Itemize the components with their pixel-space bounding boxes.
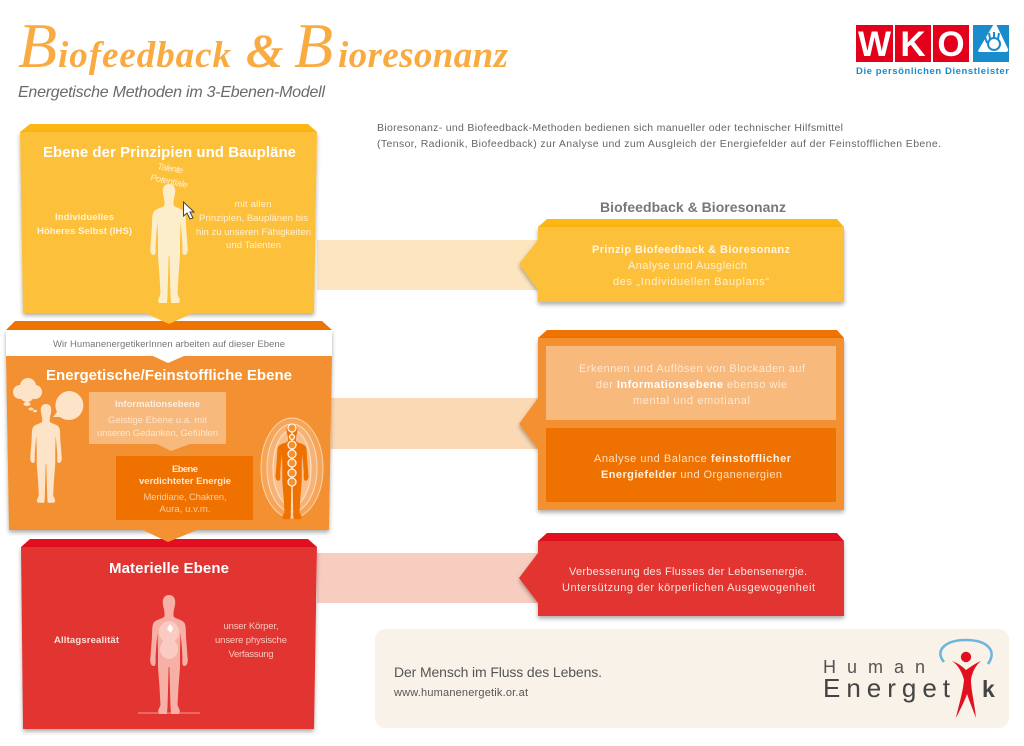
panel: Prinzip Biofeedback (519, 219, 844, 302)
banner: Wir HumanenergetikerInnen: Wir HumanenergetikerInnen arbeiten auf dieser Ebene (53, 339, 285, 350)
box: Energiefelder (546, 428, 836, 502)
text: Prinzipien description: Prinzipien, Bauplänen bis (199, 213, 308, 224)
text: Prinzipien description (196, 199, 311, 251)
box: Informationsebene: Geistige Ebene u.a. mit (108, 415, 207, 426)
logo: WKO: Die persönlichen Dienstleister (856, 66, 1009, 77)
text: physical description: unsere physische (215, 635, 287, 646)
panel: Lebensenergie: Verbesserung des Flusses der Lebensenergie. (569, 566, 807, 578)
footer url: www.humanenergetik.or.at (393, 687, 528, 699)
footer slogan: Der Mensch im Fluss des Lebens. (394, 664, 602, 680)
panel: Materielle Ebene (21, 539, 317, 729)
connector band: yellow (317, 240, 539, 290)
logo: WKO: K (900, 25, 926, 64)
box: Ebene verdichteter Energie: Meridiane, Chakren, (144, 492, 226, 503)
text: Prinzipien description: mit allen (234, 199, 272, 210)
banner: Wir HumanenergetikerInnen (6, 330, 332, 363)
panel: Prinzip Biofeedback: Analyse und Ausgleich (628, 260, 747, 272)
panel: Ebene der Prinzipien (20, 124, 317, 313)
text: Prinzipien description: hin zu unseren Fähigkeiten (196, 227, 311, 238)
logo: Human Energetik: Human (823, 657, 925, 677)
panel: Prinzip Biofeedback: Prinzip Biofeedback & Bioresonanz (592, 244, 790, 256)
icon: human figure (30, 404, 62, 503)
box: Energiefelder: Analyse und Balance feinstofflicher (594, 453, 792, 465)
text: Prinzipien description: und Talenten (226, 240, 281, 251)
box: Informationsebene (89, 392, 226, 451)
title: iofeedback (58, 35, 232, 76)
heading: Energetische/Feinstoffliche Ebene: Energetische/Feinstoffliche Ebene (46, 367, 292, 384)
heading: Materielle Ebene: Materielle Ebene (109, 560, 229, 577)
panel: Lebensenergie: Untersützung der körperlichen Ausgewogenheit (562, 582, 815, 594)
logo: WKO (856, 22, 1009, 77)
text: physical description: unser Körper, (224, 621, 278, 632)
label: Individuelles Höheres Selbst (37, 212, 132, 237)
handwriting: Talente Potentiale (150, 161, 189, 190)
handwriting: Talente Potentiale: Talente (157, 161, 184, 175)
box: Informationsebene: Informationsebene (115, 399, 200, 410)
footer panel (375, 629, 1009, 728)
intro text (377, 122, 941, 150)
box: Informationsebene: der Informationsebene ebenso wie (596, 379, 787, 391)
icon: speech bubble (53, 391, 83, 420)
box: Informationsebene: Erkennen und Auflösen von Blockaden auf (579, 363, 806, 375)
arrow: yellow to orange (145, 313, 193, 324)
panel: Energetische Ebene (6, 321, 332, 530)
box: Informationsebene (546, 346, 836, 420)
icon: thought cloud (13, 378, 42, 412)
logo: Human Energetik: Energet (823, 673, 951, 703)
heading: Ebene der Prinzipien und Baupläne: Ebene der Prinzipien und Baupläne (43, 144, 296, 161)
box: Ebene verdichteter Energie: verdichteter Energie (139, 476, 231, 487)
title: & (246, 25, 283, 78)
label: Individuelles Höheres Selbst: Individuelles (55, 212, 114, 223)
icon: body with organs (138, 595, 200, 714)
icon: human figure (150, 184, 188, 303)
intro text: (Tensor, Radionik, Biofeedback) zur Analyse und zum Ausgleich der Energiefelder auf der Feinstofflichen Ebene. (377, 138, 941, 150)
handwriting: Talente Potentiale: Potentiale (150, 172, 189, 190)
heading: Biofeedback & Bioresonanz: Biofeedback & Bioresonanz (600, 199, 786, 215)
panel: Prinzip Biofeedback: des „Individuellen Bauplans“ (613, 276, 769, 288)
title: B (294, 10, 333, 81)
box: Energiefelder: Energiefelder und Organenergien (601, 469, 782, 481)
logo: Human Energetik: k (982, 676, 995, 702)
icon: aura with chakras (261, 418, 323, 519)
panel: Lebensenergie (519, 533, 844, 616)
box: Ebene verdichteter Energie (116, 456, 253, 520)
label: Alltagsrealität: Alltagsrealität (54, 635, 120, 646)
title: ioresonanz (338, 35, 509, 76)
intro text: Bioresonanz- und Biofeedback-Methoden bedienen sich manueller oder technischer Hilfsmittel (377, 122, 843, 134)
panel: Blockaden und Energiefelder (519, 330, 844, 510)
icon: mouse cursor (184, 202, 194, 219)
box: Informationsebene: mental und emotianal (633, 395, 750, 407)
box: Ebene verdichteter Energie: Aura, u.v.m. (160, 504, 210, 515)
text: physical description (215, 621, 287, 660)
box: Informationsebene: unseren Gedanken, Gefühlen (97, 428, 218, 439)
logo: WKO: W (858, 25, 891, 64)
title: B (18, 10, 57, 81)
connector band: red (317, 553, 539, 603)
connector band: orange (331, 398, 539, 449)
arrow: orange to red (143, 530, 197, 542)
label: Individuelles Höheres Selbst: Höheres Selbst (IHS) (37, 226, 132, 237)
box: Ebene verdichteter Energie: Ebene (172, 464, 198, 475)
subtitle: Energetische Methoden im 3-Ebenen-Modell (18, 84, 325, 101)
logo: Human Energetik (823, 640, 995, 718)
logo: WKO: O (937, 25, 965, 64)
text: physical description: Verfassung (228, 649, 274, 660)
